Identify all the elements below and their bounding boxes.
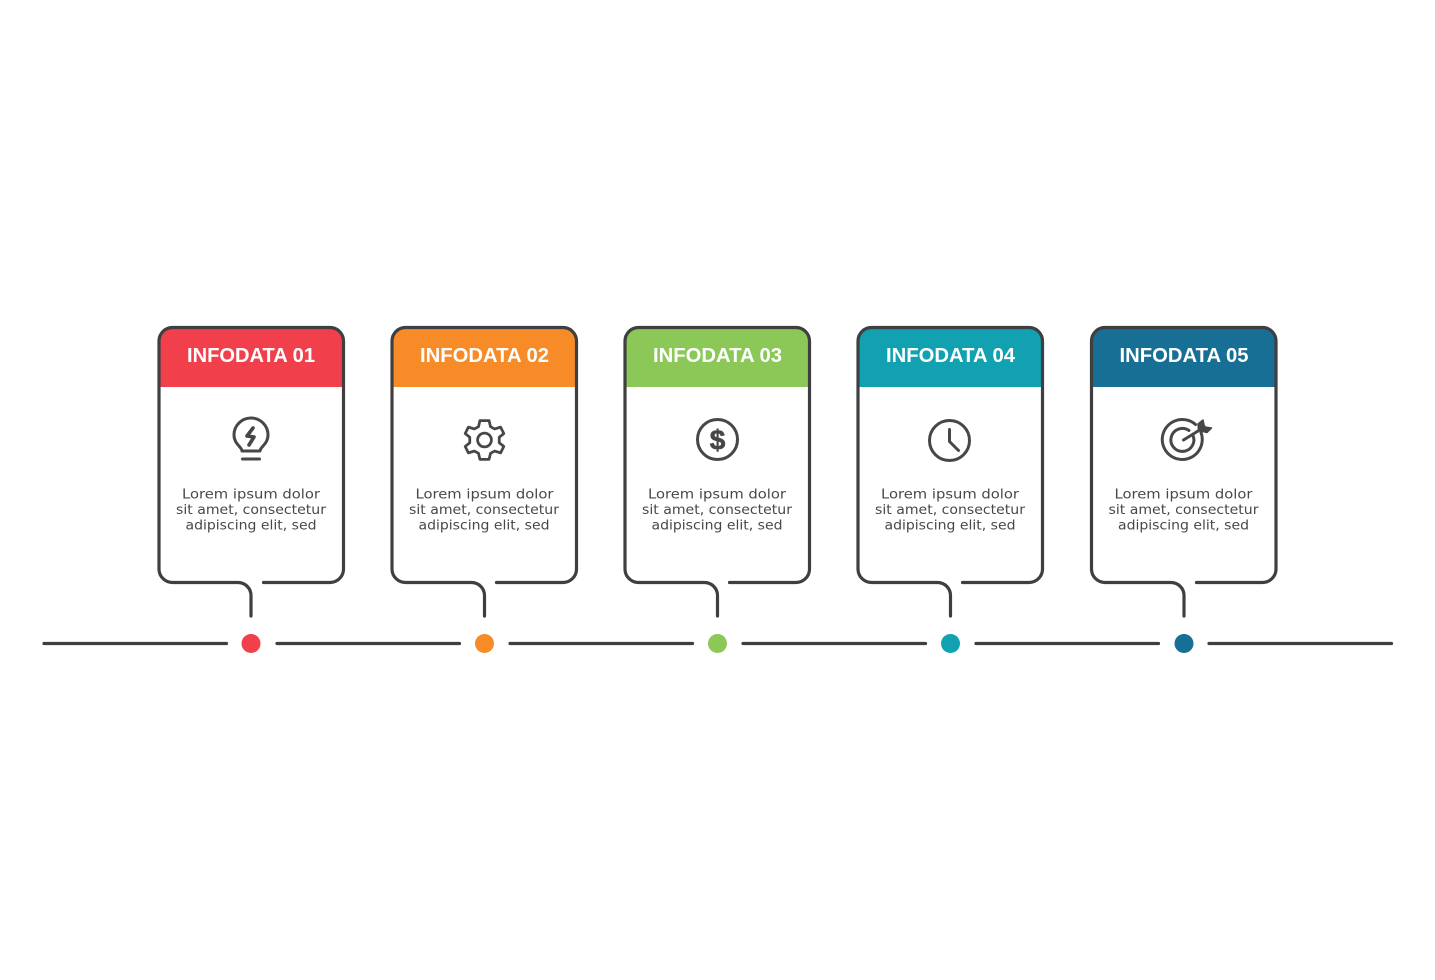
- text 03: sit amet, consectetur: [642, 502, 792, 518]
- header: infodata 04: [859, 328, 1042, 387]
- heading 02: INFODATA 02: [420, 345, 549, 367]
- text 04: Lorem ipsum dolor: [881, 486, 1019, 502]
- text 01: adipiscing elit, sed: [186, 518, 316, 534]
- card outline 02: [392, 328, 576, 616]
- icon: dollar coin: [698, 420, 738, 460]
- panel: infodata 05: [1092, 328, 1276, 616]
- header: infodata 05: [1092, 328, 1276, 387]
- panel: infodata 02: [392, 328, 576, 616]
- heading 05: INFODATA 05: [1120, 345, 1248, 367]
- icon: target with arrow: [1162, 419, 1212, 459]
- marker 05: [1174, 634, 1194, 653]
- panel: infodata 03: [625, 328, 810, 616]
- text 02: sit amet, consectetur: [409, 502, 559, 518]
- text 05: Lorem ipsum dolor: [1114, 486, 1253, 502]
- panel: infodata 04: [858, 328, 1042, 616]
- marker 01: [242, 634, 260, 653]
- marker 03: [708, 634, 727, 653]
- heading 03: INFODATA 03: [653, 345, 782, 367]
- card outline 03: [625, 328, 810, 616]
- heading 01: INFODATA 01: [187, 345, 315, 367]
- icon: clock: [930, 420, 970, 460]
- panel: infodata 01: [159, 328, 344, 616]
- text 03: adipiscing elit, sed: [652, 518, 782, 534]
- card outline 04: [858, 328, 1042, 616]
- heading 04: INFODATA 04: [886, 345, 1016, 367]
- text 02: Lorem ipsum dolor: [416, 486, 554, 502]
- header: infodata 01: [160, 328, 343, 387]
- marker 02: [475, 634, 494, 653]
- card outline 01: [159, 328, 344, 616]
- text 05: adipiscing elit, sed: [1118, 518, 1249, 534]
- text 05: sit amet, consectetur: [1108, 502, 1259, 518]
- text 01: Lorem ipsum dolor: [182, 486, 320, 502]
- icon: gear: [465, 421, 504, 459]
- text 04: adipiscing elit, sed: [884, 518, 1016, 534]
- icon: light bulb: [234, 418, 268, 459]
- timeline: [44, 642, 1392, 645]
- text 03: Lorem ipsum dolor: [648, 486, 786, 502]
- text 01: sit amet, consectetur: [176, 502, 326, 518]
- header: infodata 03: [626, 328, 809, 387]
- icon: dollar coin: $: [710, 424, 726, 456]
- header: infodata 02: [393, 328, 576, 387]
- text 04: sit amet, consectetur: [875, 502, 1025, 518]
- card outline 05: [1092, 328, 1276, 616]
- marker 04: [941, 634, 960, 653]
- text 02: adipiscing elit, sed: [418, 518, 550, 534]
